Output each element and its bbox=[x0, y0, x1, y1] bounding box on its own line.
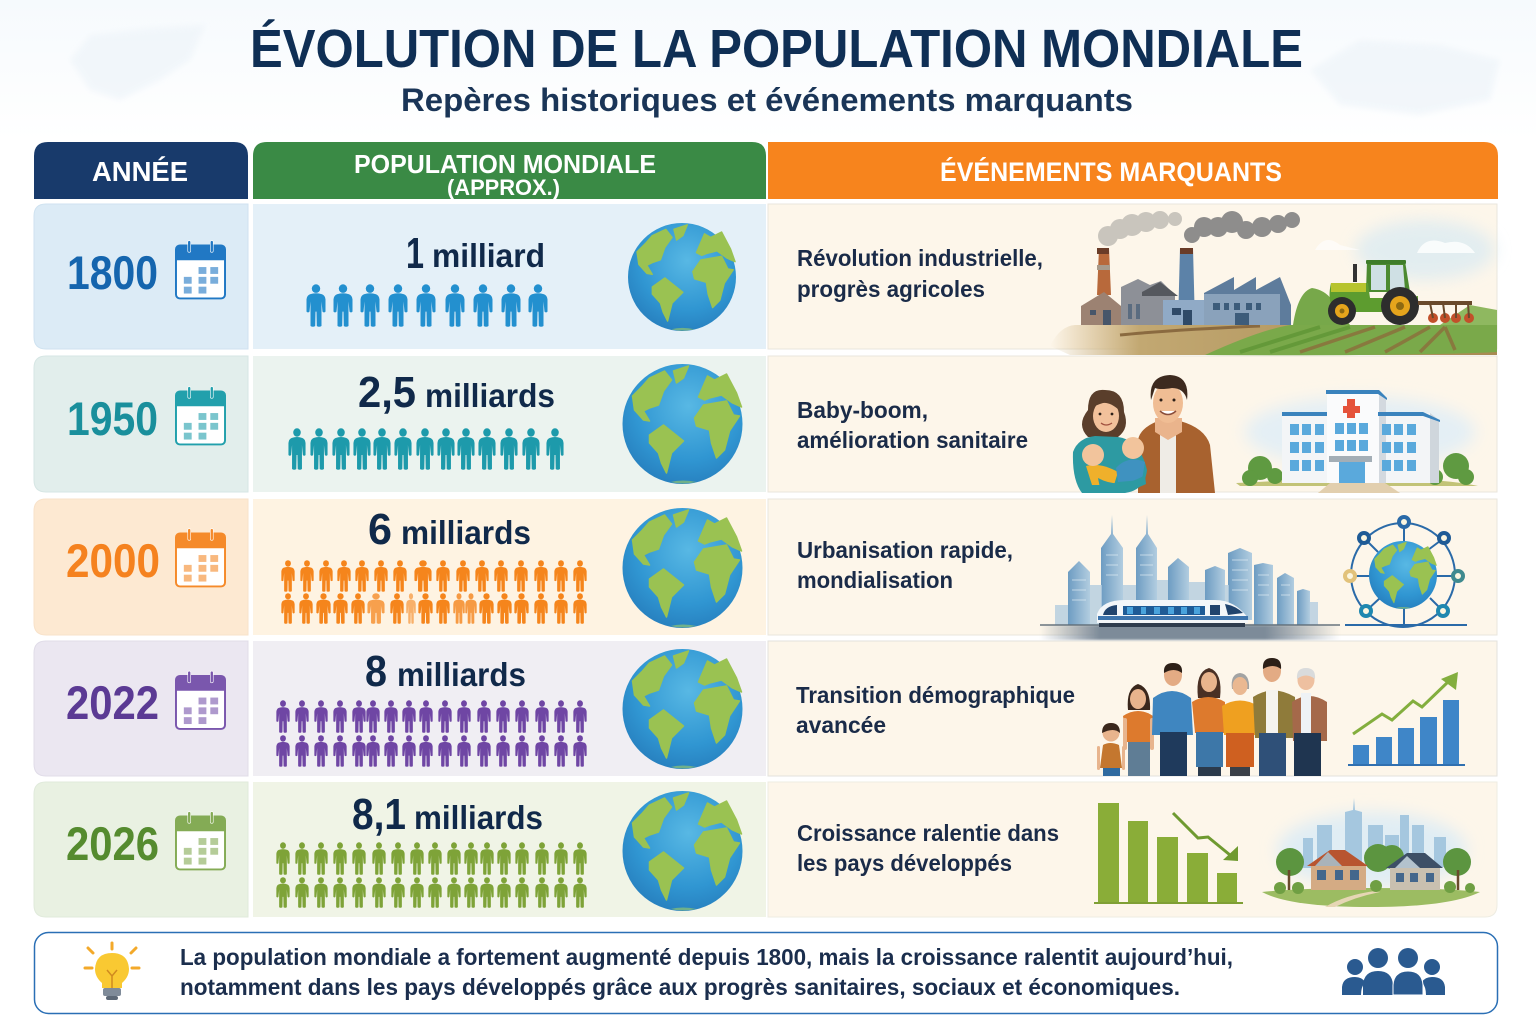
illustration: hospital bbox=[1236, 390, 1478, 493]
year cell 1950: 1950 bbox=[67, 392, 158, 445]
event cell 2000: Urbanisation rapide, bbox=[797, 537, 1013, 563]
row 2026 bbox=[34, 782, 1497, 917]
population cell 2022 bbox=[253, 641, 766, 776]
event cell 2026: les pays développés bbox=[797, 850, 1012, 876]
year cell 1800 bbox=[34, 204, 248, 349]
population cell 2026 bbox=[253, 782, 766, 917]
illustration: factories and tractor bbox=[1050, 211, 1497, 355]
year cell 1950 bbox=[34, 356, 248, 492]
event cell 2026: Croissance ralentie dans bbox=[797, 820, 1059, 846]
population cell 2000: milliards bbox=[401, 514, 531, 551]
year cell 2000: 2000 bbox=[66, 534, 160, 587]
illustration: houses, trees and city skyline bbox=[1262, 798, 1480, 907]
header: événements marquants bbox=[768, 142, 1498, 199]
event cell 1950 bbox=[768, 356, 1497, 492]
header: population mondiale: POPULATION MONDIALE bbox=[354, 149, 656, 179]
header: population mondiale: (APPROX.) bbox=[447, 175, 560, 200]
header: année: ANNÉE bbox=[92, 156, 188, 187]
header: événements marquants: ÉVÉNEMENTS MARQUANTS bbox=[940, 156, 1282, 187]
population cell 2022: 8 bbox=[365, 647, 387, 696]
row 1950 bbox=[34, 356, 1497, 493]
year cell 2026: 2026 bbox=[66, 817, 159, 870]
population cell 2026: 8,1 bbox=[352, 790, 406, 839]
event cell 2000 bbox=[768, 499, 1497, 635]
population cell 2000: 6 bbox=[368, 505, 392, 554]
illustration: declining bar chart with arrow bbox=[1094, 803, 1243, 903]
illustration: connected globe bbox=[1345, 517, 1467, 627]
event cell 2022: Transition démographique bbox=[796, 682, 1075, 708]
row 2022 bbox=[34, 641, 1497, 776]
header: année bbox=[34, 142, 248, 199]
population cell 1800 bbox=[253, 204, 766, 349]
illustration: family with babies bbox=[1073, 375, 1215, 493]
icon: group of people bbox=[1342, 948, 1445, 995]
year cell 2022: 2022 bbox=[66, 676, 159, 729]
event cell 1800: progrès agricoles bbox=[797, 276, 985, 302]
illustration: city skyline and train bbox=[1040, 515, 1340, 640]
subtitle: Repères historiques et événements marquants bbox=[401, 82, 1133, 118]
event cell 2026 bbox=[768, 782, 1497, 917]
population cell 1800: 1 bbox=[406, 229, 424, 278]
illustration: seven people of different ages bbox=[1097, 658, 1327, 776]
event cell 2022 bbox=[768, 641, 1497, 776]
year cell 2026 bbox=[34, 782, 248, 917]
year cell 1800: 1800 bbox=[67, 246, 158, 299]
population cell 1950 bbox=[253, 356, 766, 492]
event cell 2000: mondialisation bbox=[797, 567, 953, 593]
callout text bbox=[180, 944, 1233, 1000]
year cell 2022 bbox=[34, 641, 248, 776]
callout text: notamment dans les pays développés grâce aux progrès sanitaires, sociaux et économiques. bbox=[180, 974, 1180, 1000]
population cell 2000 bbox=[253, 499, 766, 635]
event cell 1800: Révolution industrielle, bbox=[797, 245, 1043, 271]
event cell 1950: amélioration sanitaire bbox=[797, 427, 1028, 453]
illustration: rising bar chart with arrow bbox=[1348, 672, 1465, 765]
footer callout bbox=[34, 932, 1498, 1014]
callout text: La population mondiale a fortement augmenté depuis 1800, mais la croissance ralentit aujourd’hui, bbox=[180, 944, 1233, 970]
population cell 2022: milliards bbox=[397, 656, 526, 693]
row 1800 bbox=[34, 204, 1497, 355]
row 2000 bbox=[34, 499, 1497, 640]
population cell 1950: milliards bbox=[425, 377, 555, 414]
header: population mondiale bbox=[253, 142, 766, 200]
event cell 1950: Baby-boom, bbox=[797, 397, 928, 423]
event cell 1800 bbox=[768, 204, 1497, 349]
population cell 1800: milliard bbox=[432, 237, 545, 274]
icon: light bulb bbox=[85, 943, 139, 1000]
population cell 1950: 2,5 bbox=[358, 368, 416, 417]
event cell 2022: avancée bbox=[796, 712, 886, 738]
title: ÉVOLUTION DE LA POPULATION MONDIALE bbox=[250, 19, 1303, 79]
top background band with faint world map bbox=[0, 0, 1536, 140]
population cell 2026: milliards bbox=[414, 799, 543, 836]
year cell 2000 bbox=[34, 499, 248, 635]
